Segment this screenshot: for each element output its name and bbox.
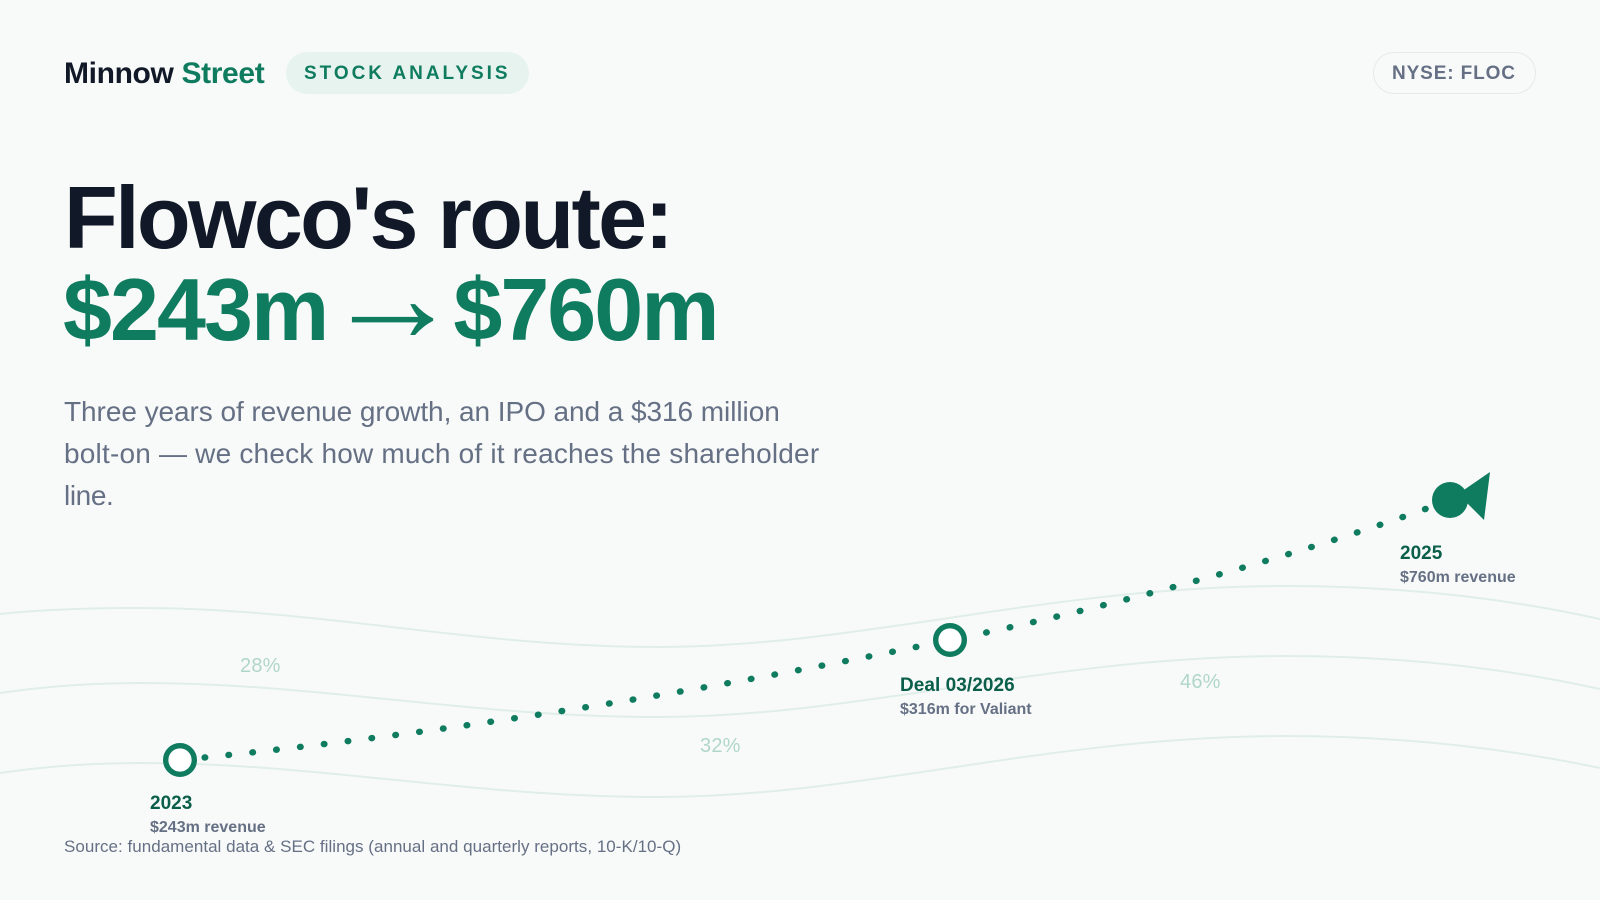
subtitle: Three years of revenue growth, an IPO and a $316 million [64,396,780,427]
tag: stock analysis [286,52,529,94]
tag: stock analysis: STOCK ANALYSIS [304,63,510,84]
icon: fish at 2025 [1432,472,1490,520]
title [63,168,718,370]
dotted route line [180,500,1450,760]
title: → [324,222,458,370]
subtitle [64,396,819,511]
title: Flowco's route: [64,168,671,267]
percent label: 32%: 32% [700,735,741,757]
label: deal 03/2026 [900,675,1032,718]
label: 2025: $760m revenue [1400,569,1516,586]
ticker tag [1373,52,1536,94]
label: 2023: 2023 [150,793,192,814]
ticker tag: NYSE: FLOC [1392,63,1516,84]
milestone marker: deal [936,626,964,654]
subtitle: line. [64,480,113,511]
percent label: 46%: 46% [1180,671,1221,693]
milestone marker: 2023 [166,746,194,774]
label: 2025 [1400,543,1516,586]
brand logo: Minnow Street [64,57,264,90]
title: $243m $760m [63,260,718,359]
label: deal 03/2026: Deal 03/2026 [900,675,1015,696]
label: deal 03/2026: $316m for Valiant [900,701,1032,718]
source note: Source: fundamental data & SEC filings (annual and quarterly reports, 10-K/10-Q) [64,837,681,856]
label: 2025: 2025 [1400,543,1443,564]
label: 2023 [150,793,266,836]
subtitle: bolt-on — we check how much of it reaches the shareholder [64,438,819,469]
label: 2023: $243m revenue [150,819,266,836]
percent label: 28%: 28% [240,655,281,677]
